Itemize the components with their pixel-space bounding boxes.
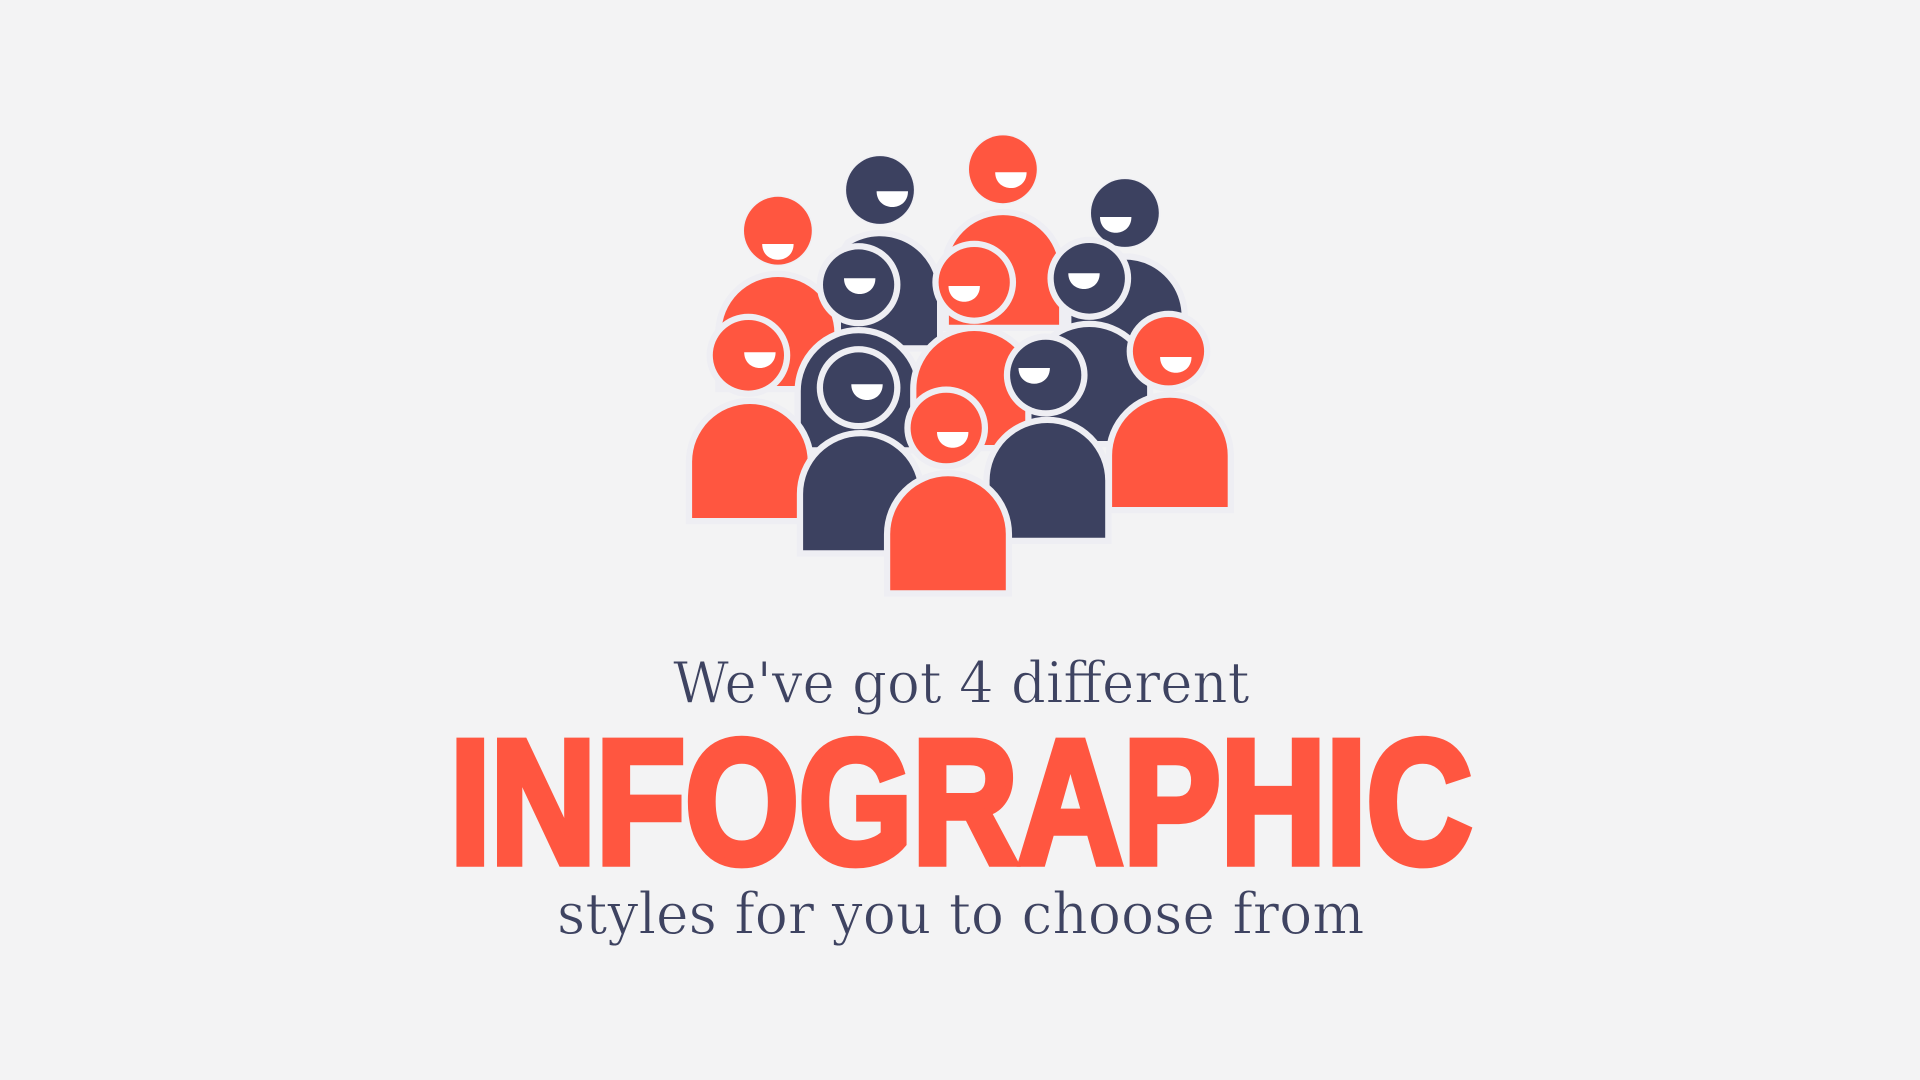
crowd illustration bbox=[692, 135, 1228, 590]
heading: INFOGRAPHIC: INFOGRAPHIC bbox=[450, 705, 1472, 901]
text: styles for you to choose from: styles for you to choose from bbox=[557, 881, 1364, 947]
person: front red right bbox=[1112, 317, 1228, 507]
person: back navy left bbox=[841, 156, 937, 345]
person: front red left bbox=[692, 320, 808, 518]
person: front navy left bbox=[803, 352, 919, 550]
person: back red centre bbox=[949, 135, 1059, 325]
text: We've got 4 different: We've got 4 different bbox=[673, 651, 1250, 717]
person: middle navy right bbox=[1032, 243, 1147, 441]
person: front navy right bbox=[990, 340, 1105, 538]
person: back red left bbox=[721, 197, 834, 386]
person: middle red centre bbox=[916, 247, 1032, 445]
person: front red centre bbox=[890, 393, 1006, 590]
person: middle navy left bbox=[801, 249, 916, 447]
person: back navy right bbox=[1071, 179, 1182, 370]
